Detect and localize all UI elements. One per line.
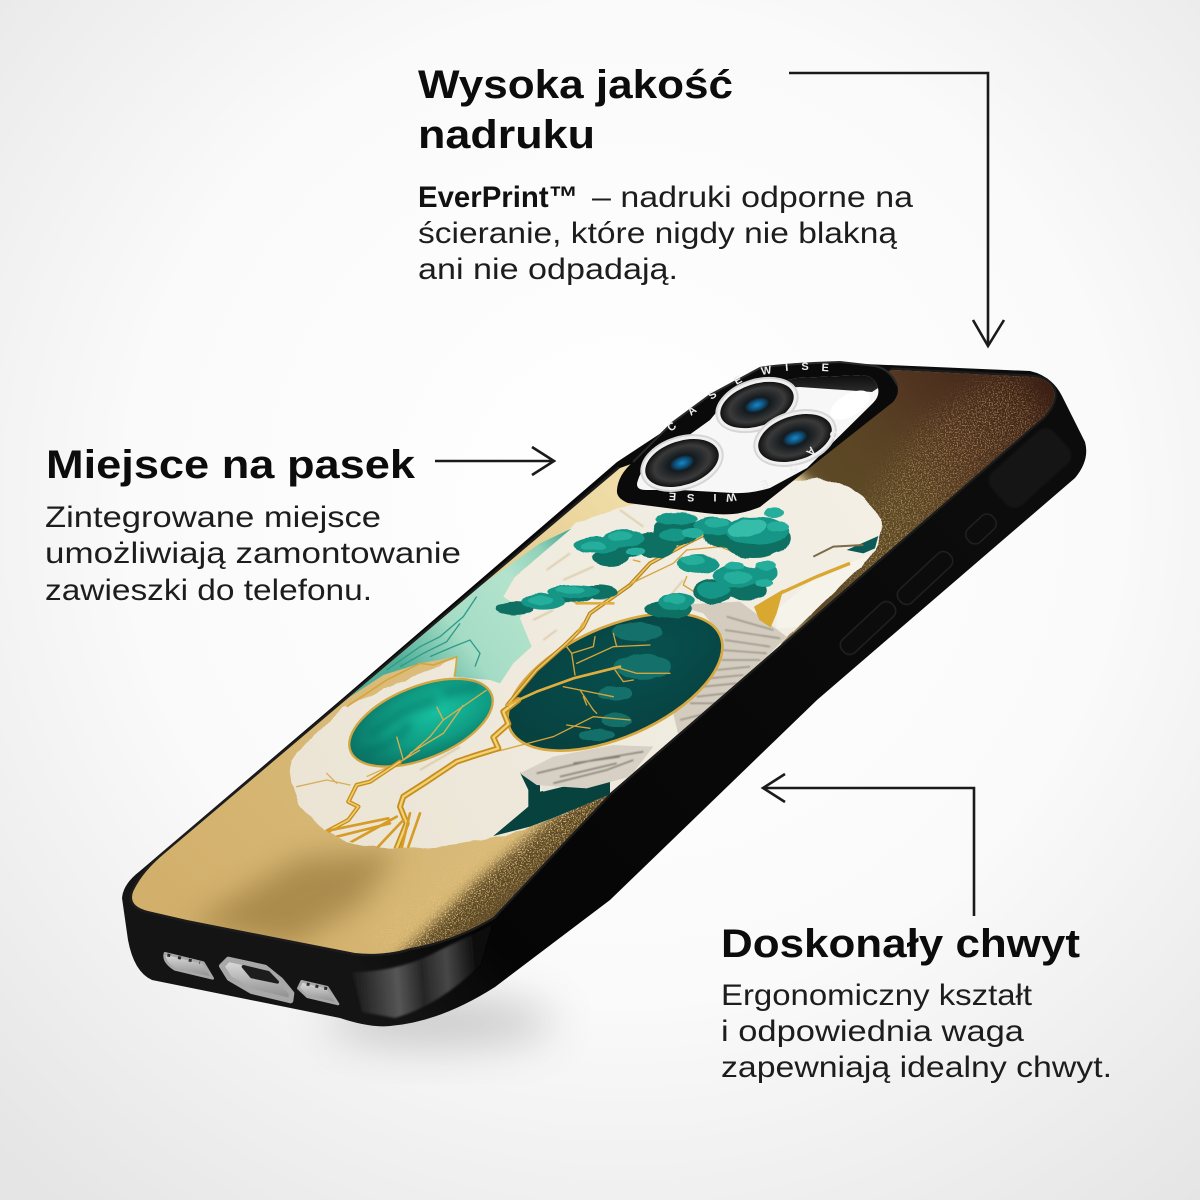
arrow: strap slot [435,447,554,475]
main branch light [507,533,707,705]
body text: i odpowiednia waga [721,1015,1024,1048]
main branch shadow [507,533,707,705]
brand top: CASEWISE [665,361,829,434]
crack [813,545,863,557]
body text [721,979,1112,1084]
gold leaf [754,589,783,627]
speaker left [165,953,213,978]
heading: Miejsce na pasek [46,443,416,487]
callout: grip [721,922,1112,1084]
printed back panel [132,370,1054,954]
lower teal [493,773,610,836]
foliage light layer [528,507,788,605]
callout: print quality [418,63,913,286]
inner top band [733,375,878,400]
bottom ports [165,953,338,1004]
upper right rock and gold leaf [754,536,883,628]
frame brand text [665,361,841,503]
foliage mid layer [521,512,788,610]
gold seam [780,563,850,593]
lower rock streaks [543,763,603,783]
brand bottom: CASEWISE [668,427,841,503]
emerald tree [367,690,487,777]
side buttons [837,424,1076,658]
marble interior [297,510,883,848]
charging port [222,959,292,1001]
lower rock streaks [537,752,643,783]
body text: umożliwiają zamontowanie [45,537,461,570]
heading: Doskonały chwyt [721,922,1080,966]
volume up [894,548,956,608]
speaker right holes [307,984,330,989]
body text: ani nie odpadają. [418,253,678,286]
white rock [798,555,871,628]
frame edge sheen [633,362,897,462]
lower emerald disc [297,661,518,848]
lens top [709,368,805,442]
strap slot [984,424,1076,512]
mint contours [387,597,480,670]
camera glass [637,375,878,493]
upper marble veins [420,510,683,777]
heading: nadruku [418,113,595,157]
dark right side [390,360,1070,965]
body text [45,501,461,607]
lower bottom details [493,772,610,836]
dark disc foliage [578,622,672,741]
body text: Ergonomiczny kształt [721,979,1033,1012]
body text [418,181,913,286]
camera frame [617,362,898,514]
lower marbled rock [520,745,653,788]
body text: zawieszki do telefonu. [45,574,372,607]
charging port opening [243,967,277,982]
satin shadow band [190,850,400,945]
second trunk and roots [297,700,518,848]
gold tree upper [507,520,737,705]
teal notch [847,536,878,553]
volume down [837,598,899,658]
heading: Wysoka jakość [418,63,733,107]
lens left [634,425,730,501]
glitter [340,370,1060,970]
body text: – nadruki odporne na [592,181,913,214]
inner trunk [507,603,620,705]
speaker right [298,981,338,1004]
body text: Zintegrowane miejsce [45,501,381,534]
small branches [572,546,731,604]
foliage [497,507,790,618]
lens right [747,400,843,476]
action button [962,511,1000,547]
marble disc [291,478,881,848]
speaker left holes [167,955,200,963]
callout: strap slot [45,443,461,607]
gold vein by mint [347,657,457,707]
body text: ścieranie, które nigdy nie blakną [418,217,897,250]
heading [418,63,733,157]
emerald marbling [363,687,480,753]
gold base [132,370,1054,954]
case body [122,362,1086,1026]
foliage dark layer [497,515,790,618]
body text: zapewniają idealny chwyt. [721,1051,1112,1084]
brown top [872,370,1054,532]
phone shadow [325,998,555,1046]
marbled rock [673,602,787,735]
side gloss [352,925,492,1018]
central details [420,510,787,788]
mint water [340,528,572,707]
body text: EverPrint™ [418,181,578,214]
dark disc [507,614,724,752]
dark disc branches [500,633,670,751]
marbled rock streaks [680,617,780,720]
arrow: print quality [789,73,1004,346]
phone case [100,350,1086,1026]
case rim highlight [132,370,1054,954]
lower white rock [543,786,564,792]
camera island [617,361,898,514]
arrow: grip [763,774,974,916]
glass glare [825,384,875,426]
